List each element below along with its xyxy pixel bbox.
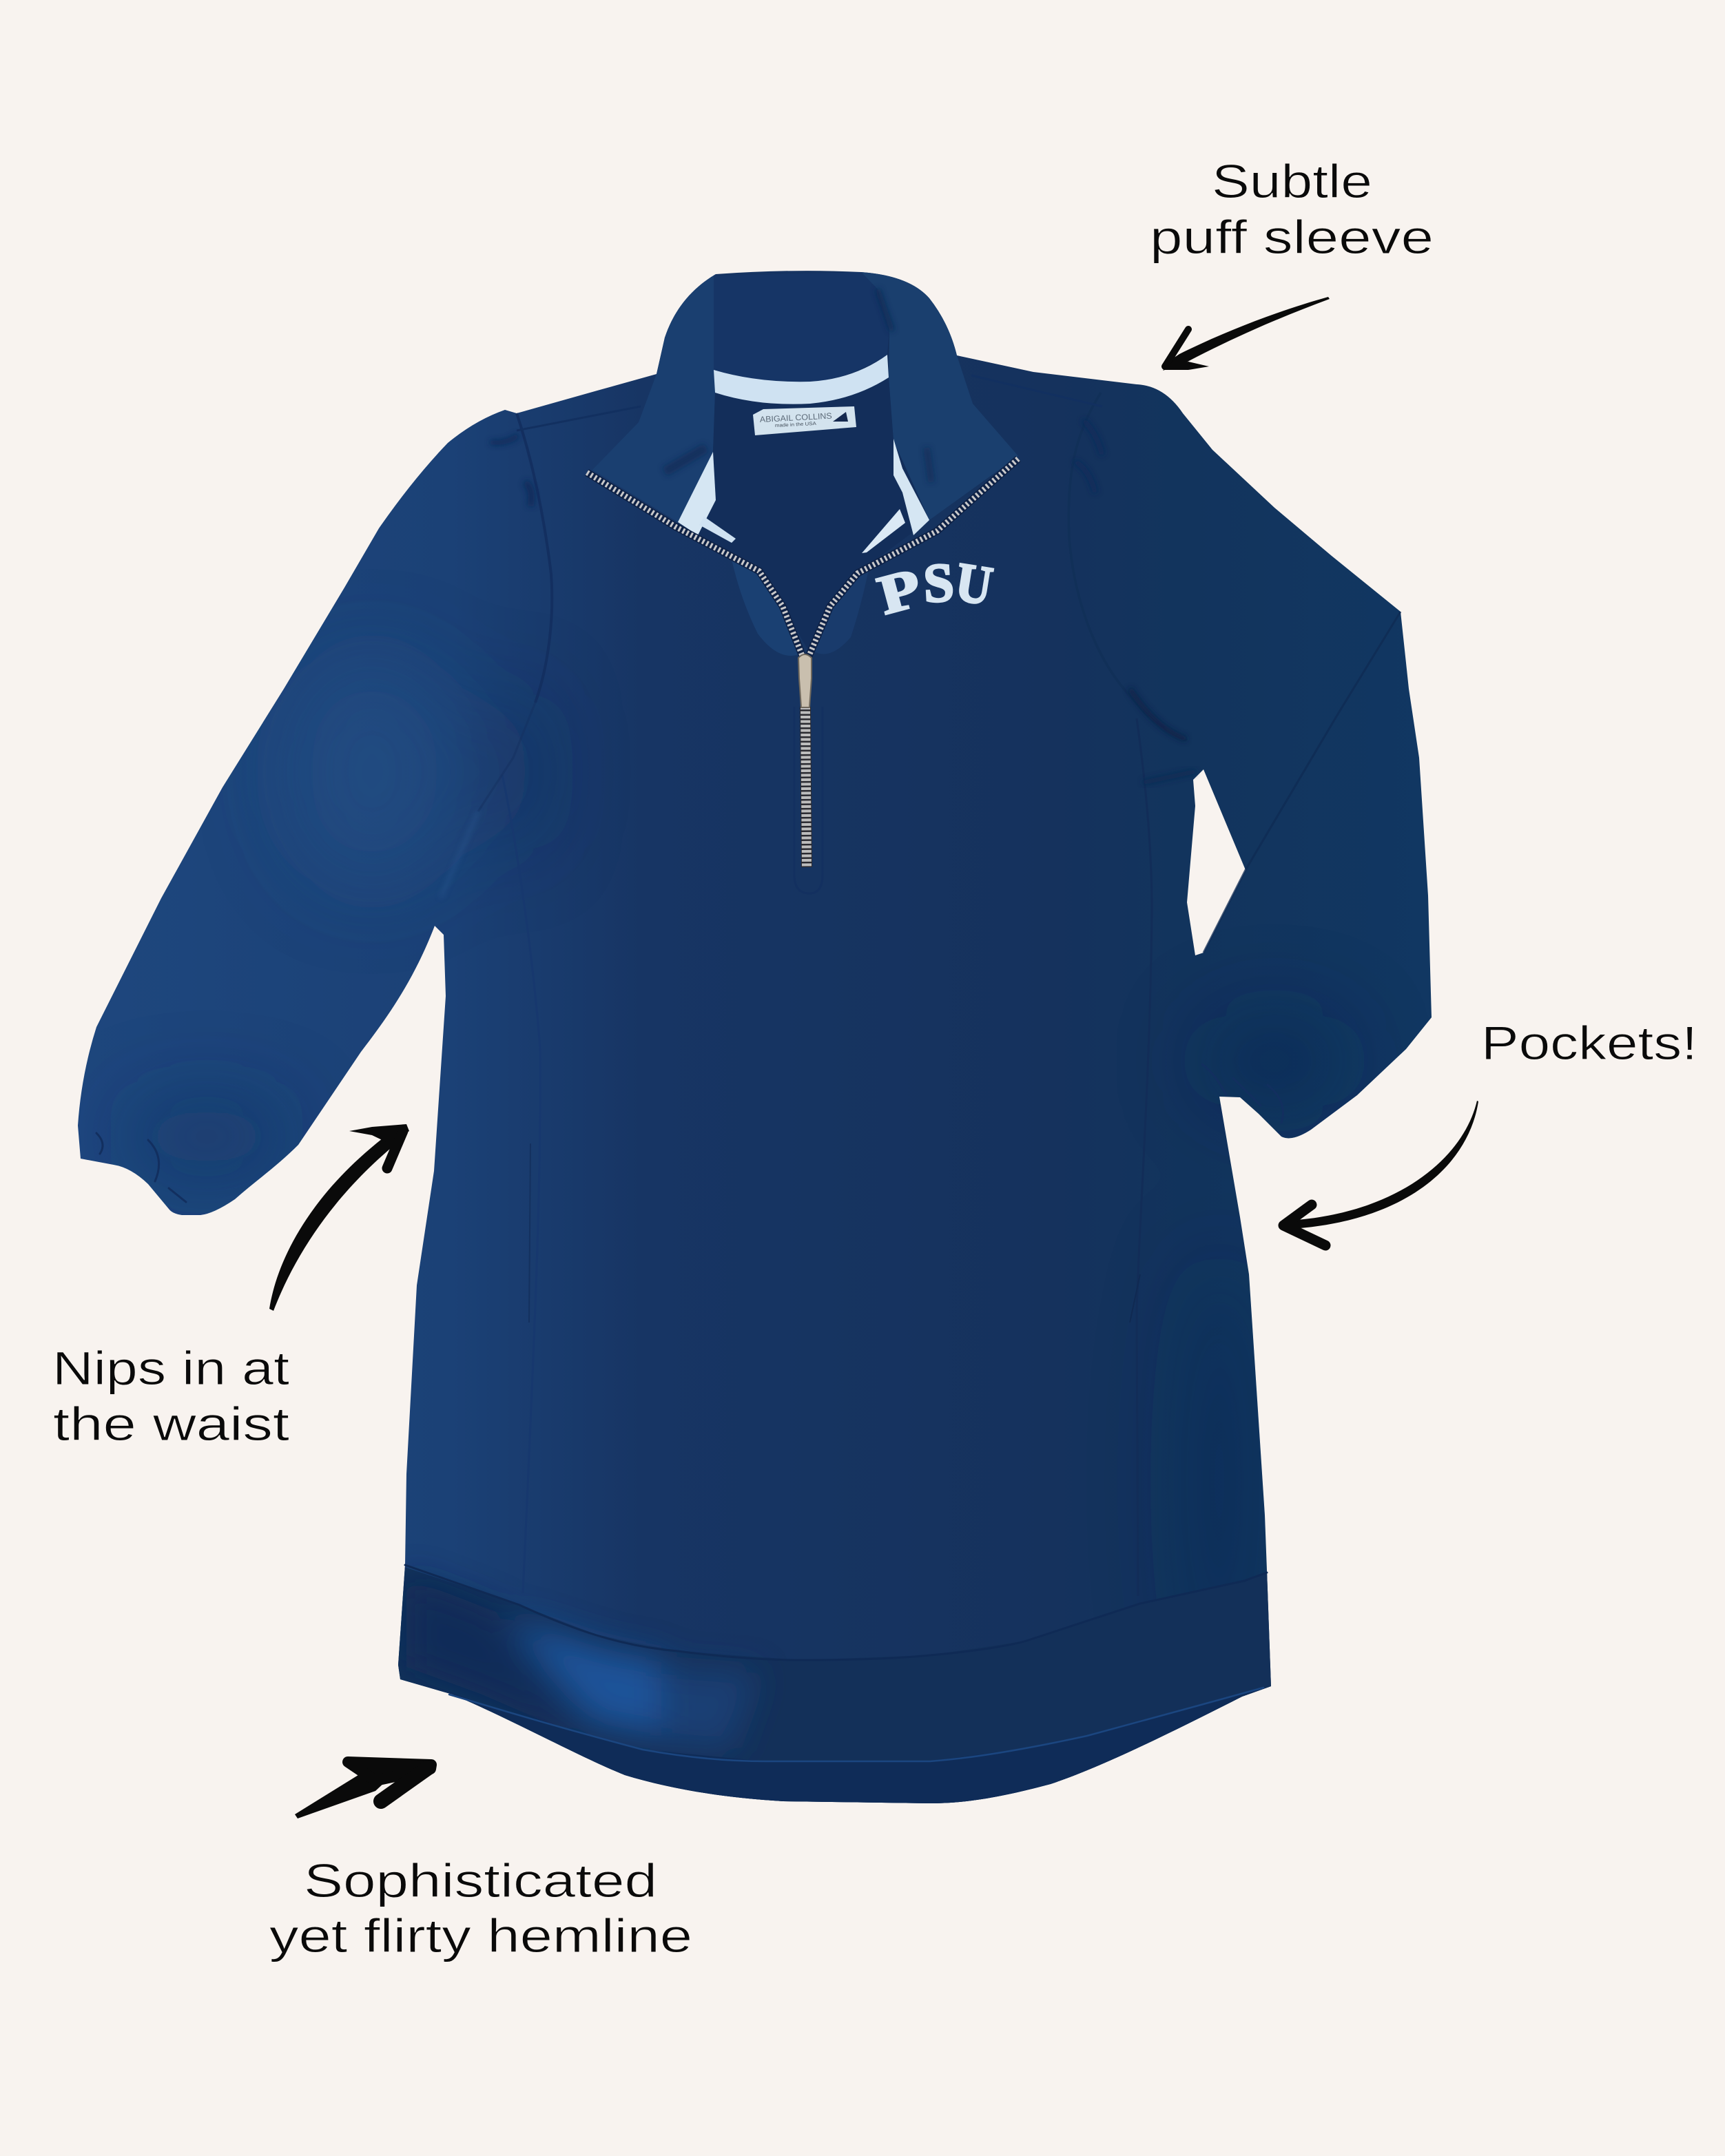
label text: puff sleeve bbox=[1150, 211, 1434, 264]
placket flap right bbox=[813, 566, 869, 654]
collar left bbox=[592, 274, 716, 522]
embroidered PSU logo: U bbox=[951, 552, 996, 617]
arrow: to hem bbox=[295, 1762, 431, 1818]
arrow: to pocket bbox=[1283, 1101, 1478, 1245]
embroidered PSU logo bbox=[872, 552, 996, 626]
zipper tape shadow bbox=[587, 459, 1018, 656]
zipper right branch bbox=[809, 459, 1018, 656]
dress silhouette bbox=[78, 271, 1432, 1803]
callout: pockets bbox=[1283, 1017, 1697, 1245]
collar right bbox=[861, 272, 1018, 520]
hem band bbox=[386, 1565, 1281, 1818]
label text bbox=[1150, 155, 1434, 264]
label text: the waist bbox=[53, 1398, 289, 1451]
placket flap left bbox=[732, 559, 799, 656]
zipper placket bbox=[794, 707, 823, 893]
tape lower right bbox=[862, 509, 905, 553]
neck tape right bbox=[894, 439, 929, 535]
tape lower left bbox=[699, 517, 736, 543]
armholes and sleeve folds bbox=[441, 375, 1401, 953]
neck label bbox=[753, 406, 856, 435]
arrow: to shoulder bbox=[1163, 297, 1330, 371]
label text bbox=[269, 1854, 692, 1962]
half zip bbox=[587, 459, 1018, 893]
neck tape back bbox=[714, 355, 889, 404]
embroidered PSU logo: P bbox=[872, 557, 928, 626]
callout: nips in at the waist bbox=[52, 1124, 409, 1451]
label text: Sophisticated bbox=[304, 1854, 657, 1907]
hem seams bbox=[405, 1565, 1267, 1761]
embroidered PSU logo: S bbox=[922, 552, 956, 614]
callout: subtle puff sleeve bbox=[1150, 155, 1434, 371]
collar fold shadows bbox=[665, 289, 931, 482]
fabric shading bbox=[124, 654, 1350, 1818]
zipper slider bbox=[798, 654, 812, 707]
neck label: ABIGAIL COLLINS bbox=[759, 411, 832, 424]
label text: Nips in at bbox=[52, 1342, 289, 1395]
label text: Subtle bbox=[1212, 155, 1372, 208]
puff sleeve gathers bbox=[490, 420, 1102, 506]
lower hem fold bbox=[466, 1686, 1271, 1803]
neck interior bbox=[676, 272, 929, 651]
neck tape left bbox=[678, 452, 716, 535]
dress illustration bbox=[78, 271, 1432, 1818]
label text: yet flirty hemline bbox=[269, 1909, 692, 1962]
neck label: made in the USA bbox=[775, 422, 816, 428]
collar bbox=[592, 272, 1018, 656]
arrow: to waist bbox=[269, 1124, 409, 1311]
side seams and pockets bbox=[502, 718, 1152, 1596]
back collar bbox=[714, 272, 889, 382]
callout: sophisticated yet flirty hemline bbox=[269, 1762, 692, 1962]
zipper left branch bbox=[587, 473, 803, 656]
zipper lower teeth bbox=[805, 707, 807, 867]
label text bbox=[52, 1342, 289, 1451]
sleeve cuff gathers bbox=[96, 1064, 1283, 1202]
label text: Pockets! bbox=[1481, 1017, 1697, 1070]
